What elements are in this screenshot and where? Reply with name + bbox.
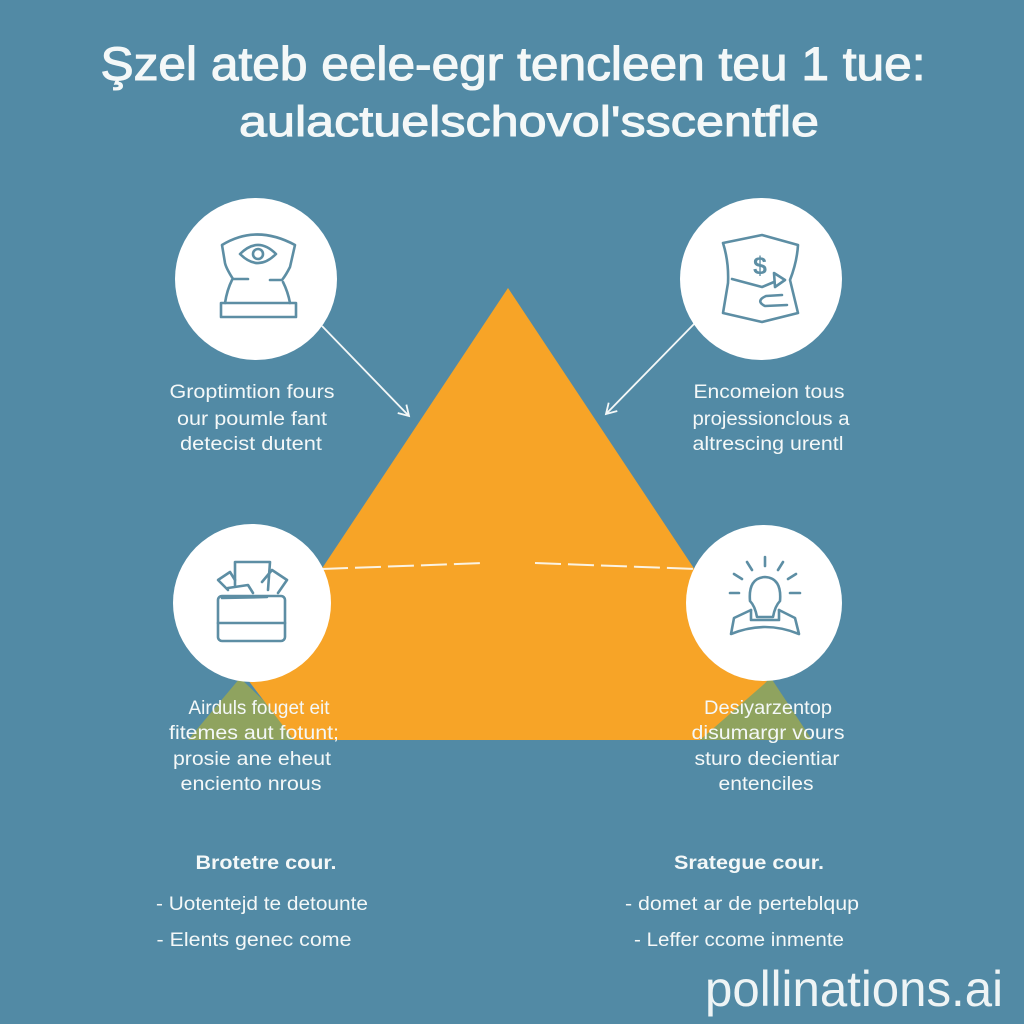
text block: bottom left caption: Airduls fouget eit xyxy=(188,698,330,719)
text block: top left caption: Groptimtion fours xyxy=(170,382,334,403)
text block: bottom left caption xyxy=(169,698,339,795)
text block: top left caption xyxy=(170,382,334,455)
text block: bottom right caption: sturo decientiar xyxy=(694,749,840,770)
panel: top left icon circle xyxy=(175,198,337,360)
text block: bottom left caption: enciento nrous xyxy=(180,774,322,795)
text block: bottom right caption xyxy=(692,698,844,795)
heading: left list: Brotetre cour. xyxy=(196,853,336,874)
arrow: top right to triangle xyxy=(606,323,695,414)
text block: left list: - Elents genec come xyxy=(156,930,352,951)
text block: bottom left caption: prosie ane eheut xyxy=(173,749,332,770)
text block: bottom right caption: entenciles xyxy=(718,774,814,795)
title: Şzel ateb eele-egr tencleen teu 1 tue: xyxy=(100,37,926,90)
arrow: top left to triangle xyxy=(322,326,409,416)
icon: eye badge xyxy=(221,234,296,317)
small green triangle left xyxy=(188,678,305,740)
watermark: pollinations.ai xyxy=(705,961,1003,1017)
icon: wallet with papers xyxy=(218,562,287,641)
text block: top right caption: projessionclous a xyxy=(692,409,850,430)
text block: right list: - Leffer ccome inmente xyxy=(634,930,844,951)
text block: bottom right caption: Desiyarzentop xyxy=(704,698,832,719)
panel: top right icon circle xyxy=(680,198,842,360)
title xyxy=(100,37,926,146)
panel: bottom left icon circle xyxy=(173,524,331,682)
dashed divider left xyxy=(322,563,484,569)
text block: top left caption: our poumle fant xyxy=(177,409,328,430)
icon: person with idea xyxy=(730,557,800,634)
icon: money document xyxy=(723,235,798,322)
text block: left list: - Uotentejd te detounte xyxy=(156,894,368,915)
text block: left list xyxy=(156,853,368,951)
small green triangle right xyxy=(700,678,812,740)
text block: right list: - domet ar de perteblqup xyxy=(625,894,859,915)
text block: bottom right caption: disumargr vours xyxy=(692,723,844,744)
icon: dollar sign: $ xyxy=(753,252,767,280)
text block: right list xyxy=(625,853,859,951)
text block: top right caption xyxy=(692,382,850,455)
text block: top left caption: detecist dutent xyxy=(180,434,323,455)
text block: top right caption: altrescing urentl xyxy=(692,434,844,455)
heading: right list: Srategue cour. xyxy=(674,853,824,874)
dashed divider right xyxy=(535,563,696,569)
panel: bottom right icon circle xyxy=(686,525,842,681)
text block: top right caption: Encomeion tous xyxy=(694,382,844,403)
title: aulactuelschovol'sscentfle xyxy=(239,98,819,146)
text block: bottom left caption: fitemes aut fotunt; xyxy=(169,723,339,744)
central orange triangle xyxy=(248,288,768,740)
